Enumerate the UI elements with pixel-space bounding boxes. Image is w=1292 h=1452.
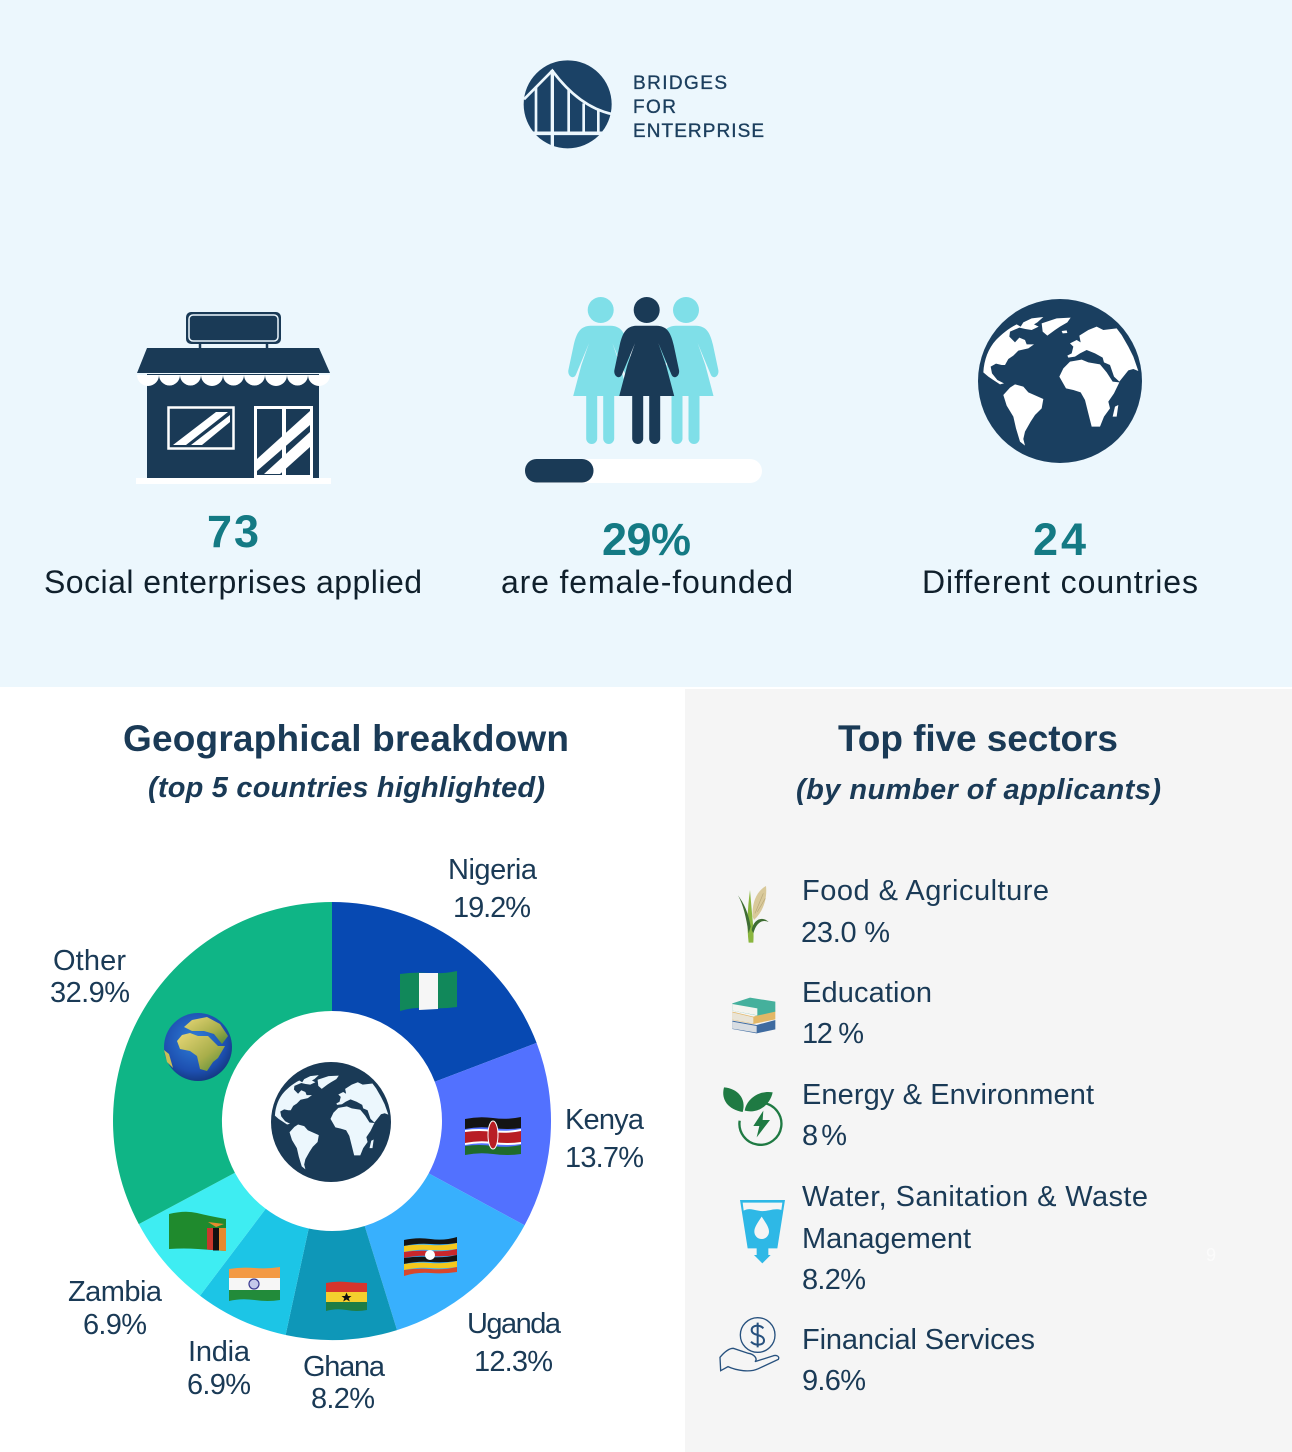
sector: Education: [732, 977, 932, 1050]
sector: Food and Agriculture: [738, 875, 1049, 949]
sector: Water, Sanitation and Waste Management: [740, 1181, 1148, 1296]
donut chart: [113, 902, 551, 1340]
sector value: 8.2%: [802, 1264, 866, 1296]
flag: Nigeria: [400, 971, 457, 1011]
logo wordmark: ENTERPRISE: [633, 121, 764, 142]
icon: earth emoji: [164, 1013, 232, 1081]
label: Nigeria: [448, 854, 538, 924]
icon: rice plant: [738, 886, 769, 943]
sector label: Water, Sanitation & Waste: [802, 1181, 1148, 1213]
panel: social enterprises stat: [44, 312, 422, 600]
segment: Ghana: [286, 1226, 397, 1340]
flag: India: [229, 1267, 280, 1301]
label: Ghana: Ghana: [303, 1351, 386, 1383]
panel: countries stat: [922, 299, 1198, 600]
sector value: 8 %: [802, 1120, 847, 1152]
icon: hand holding coin: [720, 1318, 779, 1371]
logo wordmark: FOR: [633, 97, 676, 118]
sector value: 12 %: [802, 1018, 864, 1050]
subheading: (top 5 countries highlighted): [148, 772, 545, 804]
sector label: Food & Agriculture: [802, 875, 1049, 907]
sector label: Management: [802, 1223, 971, 1255]
icon: shop: [136, 312, 331, 484]
label: Uganda: [467, 1308, 562, 1378]
segment: India: [200, 1209, 309, 1335]
segment: Kenya: [429, 1043, 551, 1225]
icon: water filter: [740, 1200, 785, 1263]
segment: Uganda: [365, 1173, 525, 1330]
stat number: 73: 73: [207, 506, 259, 557]
sector: Financial Services: [720, 1318, 1035, 1397]
icon: books: [732, 998, 775, 1033]
sector label: [802, 1181, 1148, 1255]
label: Kenya: [565, 1104, 645, 1174]
label: Uganda: 12.3%: [474, 1346, 553, 1378]
label: Nigeria: 19.2%: [453, 892, 531, 924]
panel: female-founded stat: [501, 297, 793, 600]
label: India: India: [188, 1336, 251, 1368]
logo: Bridges for Enterprise: [524, 60, 764, 148]
stat label: are female-founded: [501, 564, 793, 600]
panel: top five sectors: [720, 718, 1161, 1397]
sector: Energy and Environment: [723, 1079, 1094, 1152]
sector label: Energy & Environment: [802, 1079, 1094, 1111]
flag: Kenya: [465, 1117, 521, 1155]
label: Other: Other: [53, 945, 126, 977]
flag: Uganda: [404, 1237, 457, 1276]
page number: 9: [1206, 1245, 1216, 1265]
label: Zambia: [68, 1276, 163, 1341]
icon: globe: [978, 299, 1142, 463]
label: Zambia: 6.9%: [83, 1309, 147, 1341]
sector value: 23.0 %: [801, 917, 890, 949]
heading: Geographical breakdown: [123, 718, 569, 759]
label: India: [187, 1336, 251, 1401]
icon: leaves and lightning bolt: [723, 1087, 781, 1145]
stat label: Social enterprises applied: [44, 564, 422, 600]
stat number: 29%: 29%: [602, 514, 691, 565]
label: Other: [50, 945, 130, 1009]
stat number: 24: 24: [1033, 514, 1086, 565]
flag: Zambia: [169, 1212, 226, 1251]
label: Kenya: Kenya: [565, 1104, 645, 1136]
logo wordmark: BRIDGES: [633, 73, 727, 94]
stat label: Different countries: [922, 564, 1198, 600]
label: Ghana: 8.2%: [311, 1383, 375, 1415]
segment: Nigeria: [332, 902, 537, 1082]
subheading: (by number of applicants): [796, 774, 1161, 806]
segment: Other: [113, 902, 332, 1224]
sector label: Education: [802, 977, 932, 1009]
heading: Top five sectors: [838, 718, 1118, 759]
label: Other: 32.9%: [50, 977, 130, 1009]
label: Kenya: 13.7%: [565, 1142, 644, 1174]
label: Uganda: Uganda: [467, 1308, 562, 1340]
centre circle globe: [271, 1062, 391, 1182]
icon: three women: [568, 297, 718, 444]
logo wordmark: [633, 73, 764, 142]
woman: centre highlighted: [614, 297, 679, 444]
label: Nigeria: Nigeria: [448, 854, 538, 886]
icon: bridge emblem: [524, 60, 612, 148]
progress bar: 29%: [525, 459, 762, 483]
sector value: 9.6%: [802, 1365, 866, 1397]
sector label: Financial Services: [802, 1324, 1035, 1356]
panel: geographical breakdown: [50, 718, 645, 1415]
woman: left: [568, 297, 633, 444]
label: Zambia: Zambia: [68, 1276, 163, 1308]
flag: Ghana: [326, 1282, 367, 1311]
label: India: 6.9%: [187, 1369, 251, 1401]
woman: right: [654, 297, 718, 444]
label: Ghana: [303, 1351, 386, 1415]
segment: Zambia: [139, 1173, 266, 1296]
